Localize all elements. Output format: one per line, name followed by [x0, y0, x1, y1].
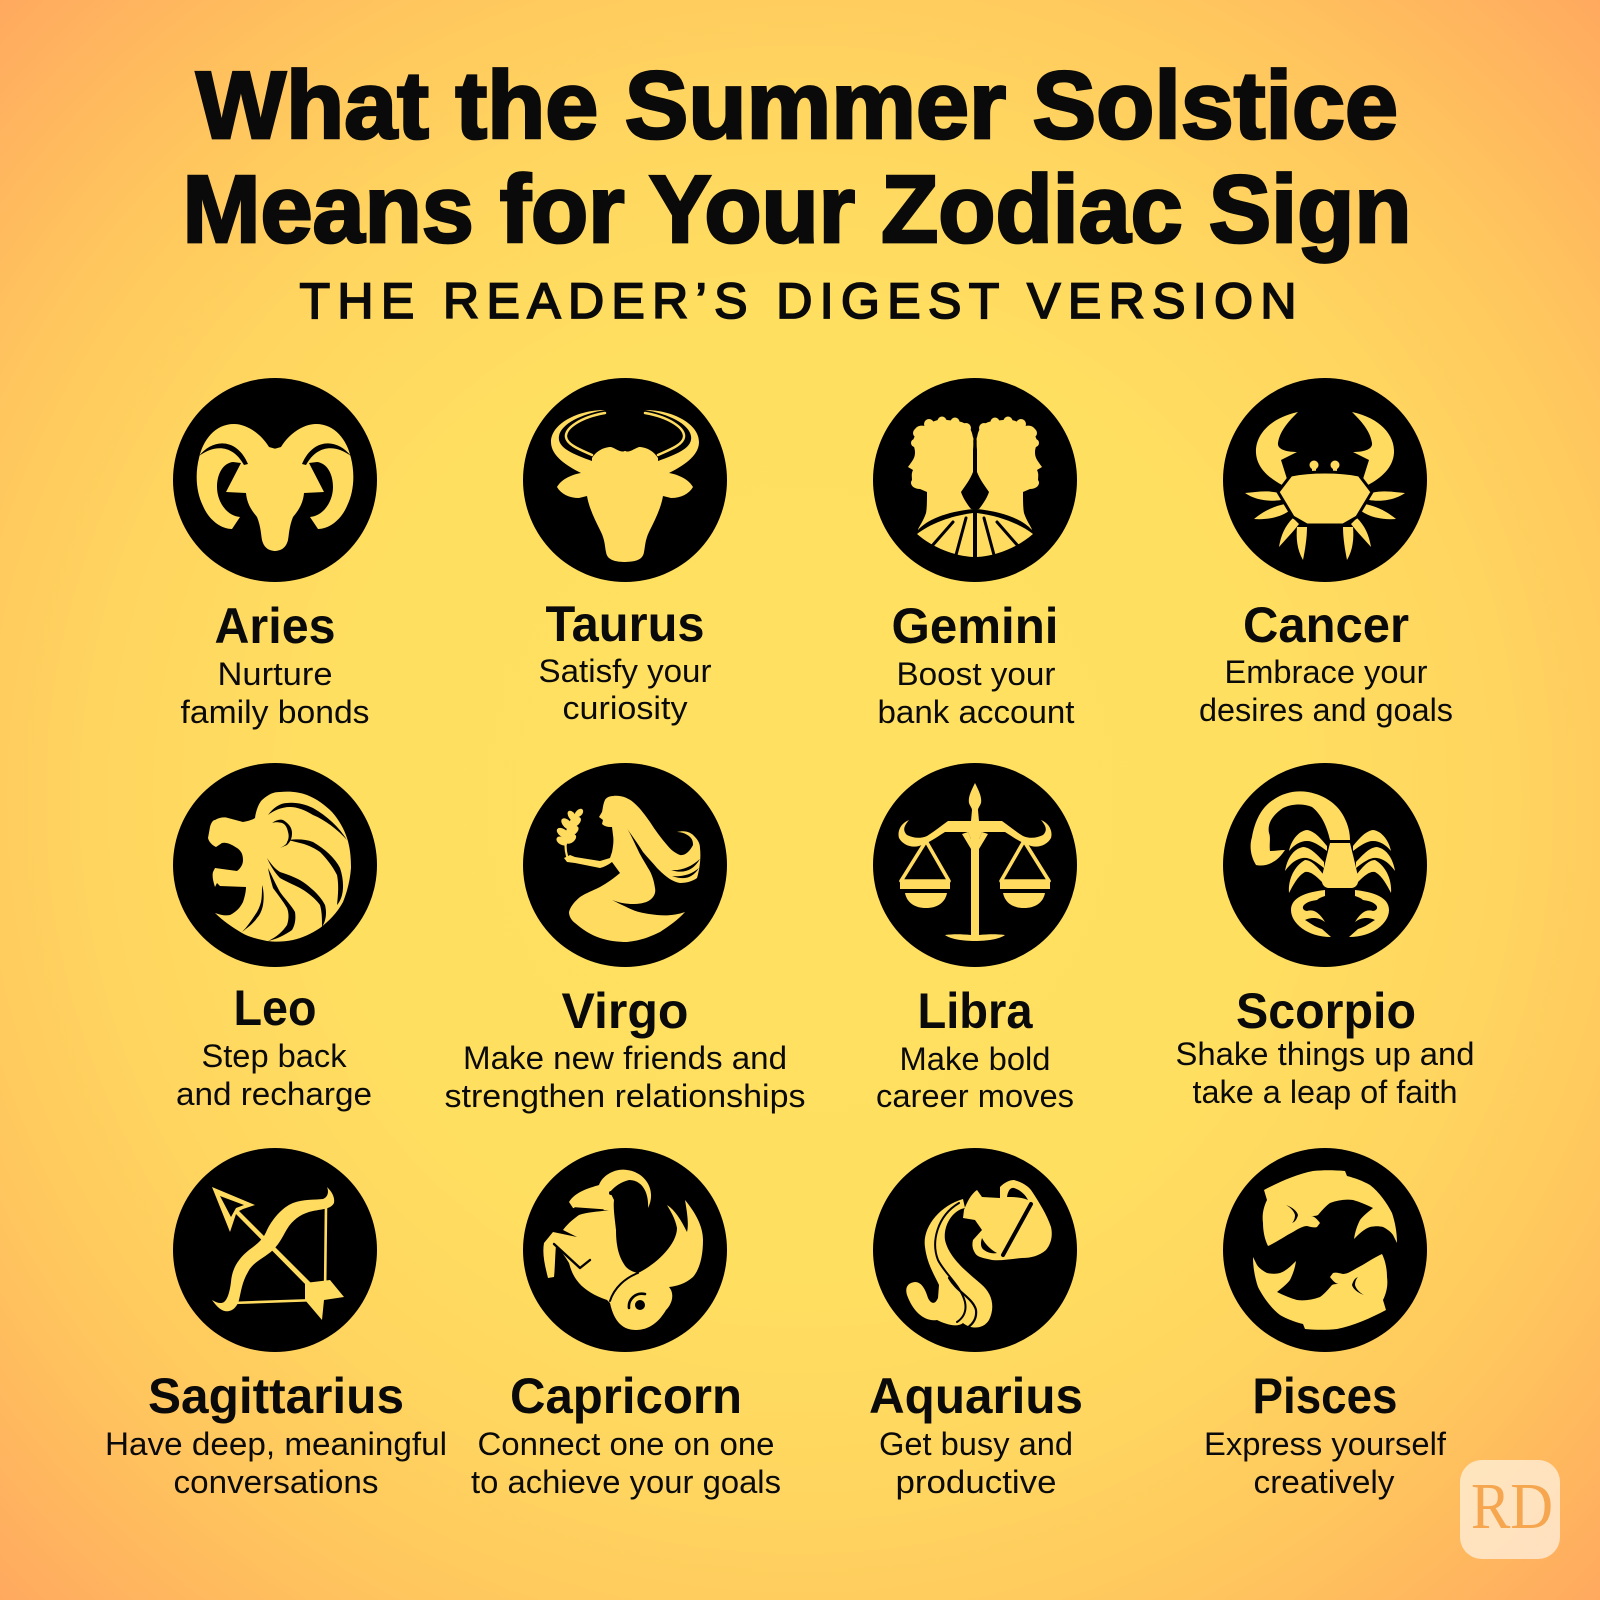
logo: RD badge — [1460, 1460, 1560, 1559]
name: Aquarius — [869, 1368, 1083, 1424]
description: curiosity — [562, 690, 688, 726]
panel: Taurus — [523, 378, 727, 726]
description: Embrace your — [1224, 654, 1428, 690]
panel: Gemini — [873, 378, 1077, 730]
description — [176, 1038, 372, 1112]
description: bank account — [878, 694, 1075, 730]
icon: bull — [523, 378, 727, 582]
name: Pisces — [1252, 1368, 1398, 1424]
name: Capricorn — [510, 1368, 742, 1424]
description: conversations — [174, 1464, 378, 1500]
description — [538, 653, 712, 726]
panel: Aries — [173, 378, 377, 730]
description: Boost your — [896, 656, 1056, 692]
description — [879, 1426, 1073, 1500]
description — [878, 656, 1075, 730]
icon: crab — [1223, 378, 1427, 582]
description: Satisfy your — [538, 653, 712, 689]
description: take a leap of faith — [1192, 1074, 1458, 1110]
description — [180, 656, 370, 730]
description: Express yourself — [1204, 1426, 1446, 1462]
title: What the Summer Solstice — [196, 52, 1398, 159]
description: Shake things up and — [1176, 1036, 1474, 1072]
icon: ram — [173, 378, 377, 582]
subtitle: THE READER’S DIGEST VERSION — [300, 273, 1296, 329]
icon: two fish — [1223, 1148, 1427, 1352]
description: Make bold — [900, 1041, 1050, 1077]
description: career moves — [876, 1078, 1074, 1114]
panel: Cancer — [1199, 378, 1453, 728]
description: Step back — [202, 1038, 348, 1074]
description — [105, 1426, 447, 1500]
description — [444, 1040, 806, 1114]
description — [1176, 1036, 1474, 1110]
name: Cancer — [1243, 597, 1409, 653]
title: Means for Your Zodiac Sign — [182, 156, 1412, 263]
icon: scorpion — [1223, 763, 1427, 967]
name: Sagittarius — [148, 1368, 404, 1424]
panel: Scorpio — [1176, 763, 1474, 1110]
description: Get busy and — [879, 1426, 1073, 1462]
panel: Aquarius — [869, 1148, 1083, 1500]
logo: RD badge: RD — [1471, 1470, 1553, 1543]
panel: Capricorn — [471, 1148, 781, 1500]
panel: Libra — [873, 763, 1077, 1114]
icon: lion — [173, 763, 377, 967]
title — [182, 52, 1412, 263]
name: Aries — [214, 598, 336, 654]
name: Gemini — [892, 598, 1058, 654]
description: family bonds — [180, 694, 370, 730]
description: creatively — [1254, 1464, 1394, 1500]
description — [1204, 1426, 1446, 1500]
icon: twins — [873, 378, 1077, 582]
description: Nurture — [218, 656, 332, 692]
panel: Virgo — [444, 763, 806, 1114]
description — [1199, 654, 1453, 728]
name: Libra — [918, 983, 1034, 1039]
name: Leo — [234, 980, 316, 1036]
icon: scales — [873, 763, 1077, 967]
description: and recharge — [176, 1076, 372, 1112]
name: Virgo — [562, 983, 688, 1039]
description: Make new friends and — [463, 1040, 787, 1076]
description — [471, 1426, 781, 1500]
panel: Leo — [173, 763, 377, 1112]
description: Have deep, meaningful — [105, 1426, 447, 1462]
description — [876, 1041, 1074, 1114]
description: Connect one on one — [478, 1426, 774, 1462]
icon: maiden — [523, 763, 727, 967]
description: strengthen relationships — [444, 1078, 806, 1114]
description: to achieve your goals — [471, 1464, 781, 1500]
panel: Sagittarius — [105, 1148, 447, 1500]
description: productive — [896, 1464, 1056, 1500]
name: Taurus — [546, 596, 704, 652]
panel: Pisces — [1204, 1148, 1446, 1500]
icon: water bearer jug — [873, 1148, 1077, 1352]
icon: bow and arrow — [173, 1148, 377, 1352]
name: Scorpio — [1236, 983, 1416, 1039]
icon: sea goat — [523, 1148, 727, 1352]
description: desires and goals — [1199, 692, 1453, 728]
